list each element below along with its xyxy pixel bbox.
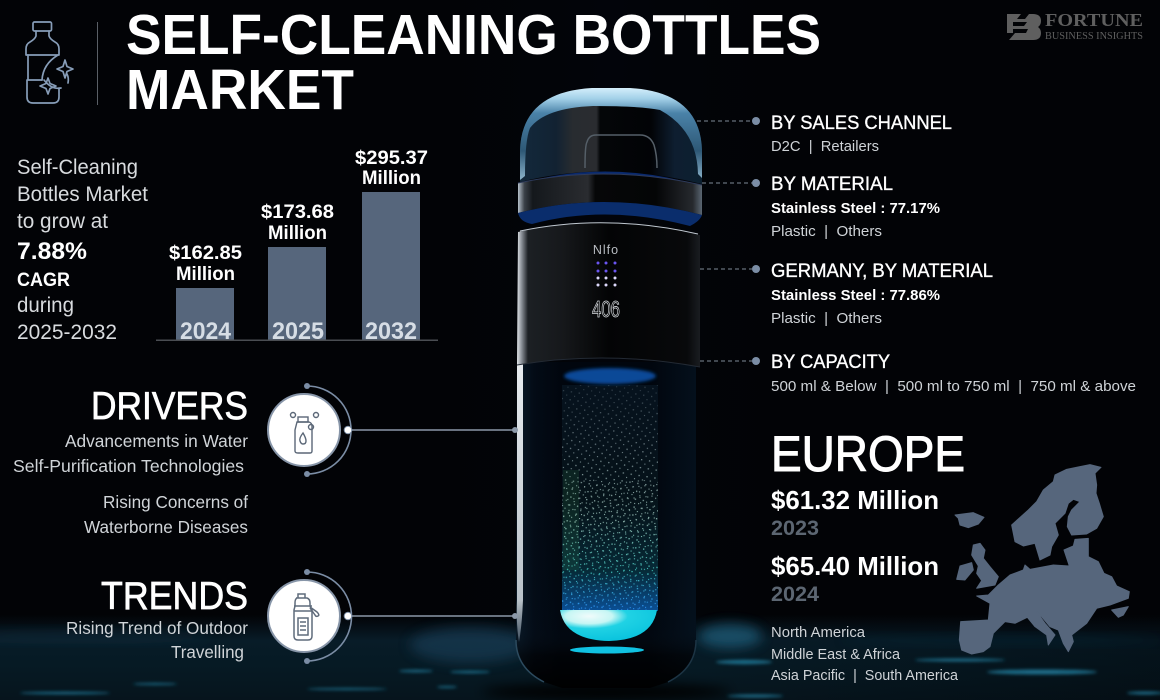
callout: by capacity: BY CAPACITY [771,352,890,373]
bar chart: market size: $295.37 [355,147,428,169]
panel: Europe regional figures: North America [771,624,866,641]
text block: CAGR summary: Self-Cleaning [17,156,138,179]
text block: CAGR summary: 2025-2032 [17,321,117,344]
panel: Europe regional figures: 2023 [771,517,819,540]
bar chart: market size: 2025 [272,318,324,345]
panel: trends: Travelling [171,642,244,662]
panel: trends: Rising Trend of Outdoor [66,618,248,638]
bar chart: market size: 2032 [365,318,417,345]
bar chart: market size: Million [176,263,235,285]
title [126,3,821,122]
callout: by sales channel: D2C | Retailers [771,138,879,155]
callout: Germany, by material: Stainless Steel : 77.86% [771,288,940,304]
callout: by material [702,174,940,240]
panel: drivers: Rising Concerns of [103,492,248,512]
callout: by sales channel [697,113,952,155]
icon: drivers bottle [268,383,518,477]
panel: Europe regional figures: Asia Pacific | South America [771,667,959,684]
text block: CAGR summary: CAGR [17,270,70,291]
bottle middle body: 406 [592,296,620,322]
panel: drivers: Advancements in Water [65,431,248,451]
bar chart: market size: $162.85 [169,242,242,264]
panel: Europe regional figures: $61.32 Million [771,485,939,515]
bar chart: market size [156,147,438,345]
bottle lower chamber [516,362,696,688]
callout: by sales channel: BY SALES CHANNEL [771,113,952,134]
bottle middle body: Nlfo [593,243,619,257]
header divider [97,22,98,105]
panel: Europe regional figures: $65.40 Million [771,551,939,581]
bottle lid [518,88,702,226]
bar chart: market size: Million [268,222,327,244]
icon: bottle with sparkles [26,22,73,103]
text block: CAGR summary: to grow at [17,210,108,233]
icon: Europe map [955,465,1129,654]
callout: by material: Plastic | Others [771,223,882,240]
panel: drivers: Self-Purification Technologies [13,456,244,476]
panel: Europe regional figures: EUROPE [771,426,965,482]
icon: trends sports bottle [268,569,518,664]
panel: Europe regional figures: Middle East & Africa [771,646,901,663]
logo: Fortune Business Insights [1007,10,1143,42]
bar chart: market size: 2024 [180,318,232,345]
text block: CAGR summary: 7.88% [17,238,87,265]
callout: by capacity: 500 ml & Below | 500 ml to 750 ml | 750 ml & above [771,378,1136,395]
bar chart: market size: Million [362,167,421,189]
text block: CAGR summary: Bottles Market [17,183,148,206]
callout: Germany, by material [700,261,993,327]
bottle illustration [516,88,702,688]
logo: Fortune Business Insights: FORTUNE [1045,10,1143,30]
title: SELF-CLEANING BOTTLES [126,3,821,67]
text block: CAGR summary [17,156,148,344]
title: MARKET [126,58,354,122]
logo: Fortune Business Insights: BUSINESS INSIGHTS [1045,31,1143,42]
panel: drivers: Waterborne Diseases [84,517,248,537]
panel: trends: TRENDS [101,575,248,618]
callout: Germany, by material: Plastic | Others [771,310,882,327]
panel: Europe regional figures [771,426,965,684]
panel: drivers [13,383,518,537]
panel: Europe regional figures: 2024 [771,583,819,606]
panel: drivers: DRIVERS [91,385,248,428]
bottle middle body [517,223,700,367]
text block: CAGR summary: during [17,294,74,317]
bar chart: market size: $173.68 [261,201,334,223]
panel: trends [66,569,518,664]
callout: by material: BY MATERIAL [771,174,893,195]
callout: by capacity [700,352,1136,395]
callout: by material: Stainless Steel : 77.17% [771,201,940,217]
callout: Germany, by material: GERMANY, BY MATERIAL [771,261,993,282]
